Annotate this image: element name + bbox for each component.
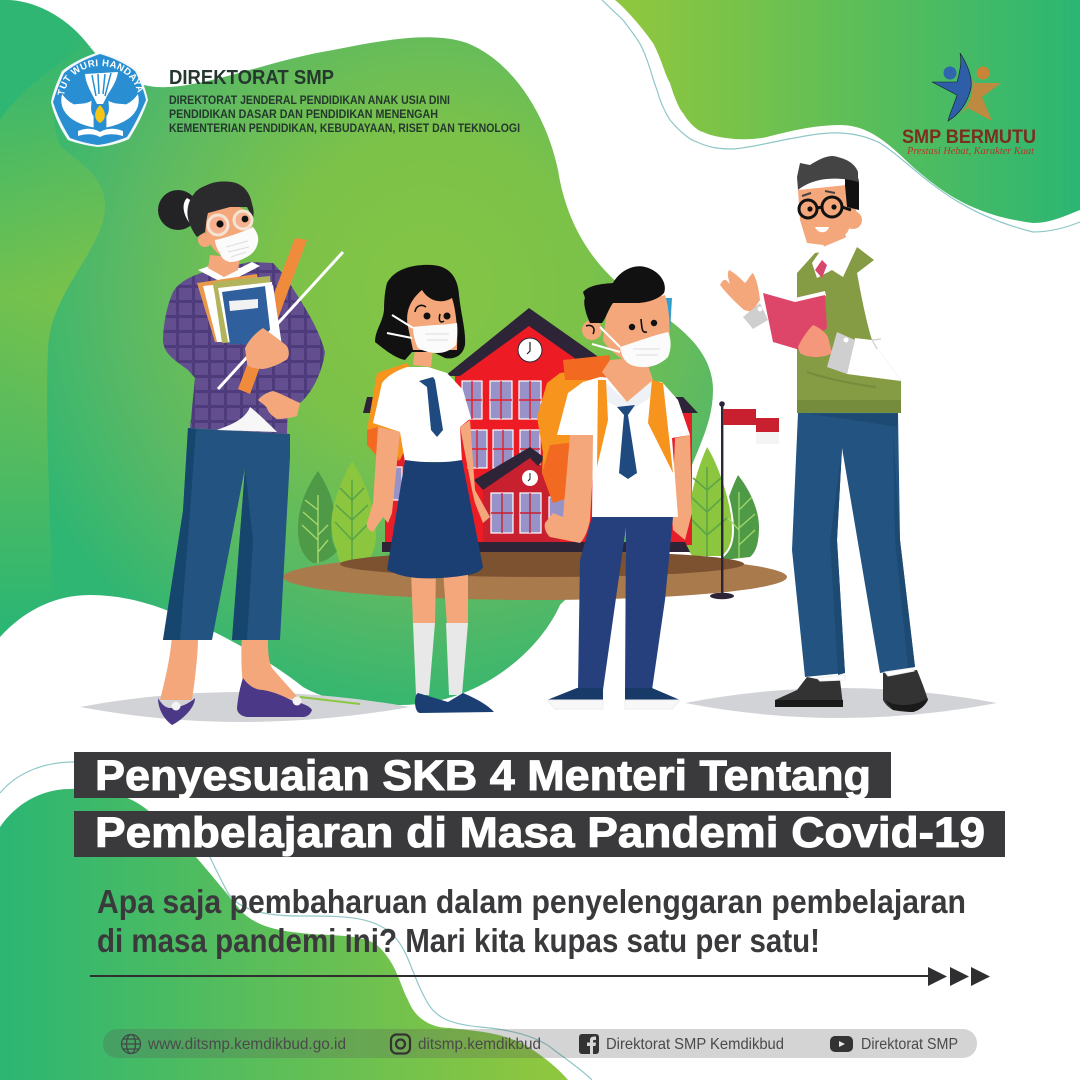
arms xyxy=(545,435,595,543)
figure: teacher man xyxy=(720,156,928,712)
ground xyxy=(283,554,787,600)
logo: SMP Bermutu xyxy=(902,53,1036,157)
right strap xyxy=(648,380,673,473)
website: www.ditsmp.kemdikbud.go.id xyxy=(147,1036,346,1053)
footer bar xyxy=(103,1029,977,1058)
trees on the left xyxy=(298,461,376,565)
collar area xyxy=(600,377,655,412)
backpack xyxy=(367,363,457,463)
head xyxy=(582,266,672,367)
header: organisation text xyxy=(169,67,520,135)
youtube name: Direktorat SMP xyxy=(861,1036,958,1053)
hand on book xyxy=(798,325,832,357)
logo: SMP Bermutu: SMP BERMUTU xyxy=(902,126,1036,148)
vest xyxy=(797,247,901,413)
background: main green blob xyxy=(0,0,713,705)
header: organisation text: KEMENTERIAN PENDIDIKAN, KEBUDAYAAN, RISET DAN TEKNOLOGI xyxy=(169,121,520,135)
collar and tie xyxy=(812,230,857,278)
logo: SMP Bermutu: Prestasi Hebat, Karakter Kuat xyxy=(906,146,1034,157)
icon: youtube xyxy=(830,1036,853,1052)
tie xyxy=(419,377,443,437)
instagram handle: ditsmp.kemdikbud xyxy=(418,1036,541,1053)
shoes xyxy=(415,693,494,713)
title bars xyxy=(74,752,1005,857)
illustration: ground shadows xyxy=(80,688,997,722)
red book xyxy=(763,291,827,350)
header: organisation text: DIREKTORAT SMP xyxy=(169,67,334,89)
title bars: Penyesuaian SKB 4 Menteri Tentang xyxy=(95,752,871,800)
purple plaid top xyxy=(163,262,325,434)
subtitle: di masa pandemi ini? Mari kita kupas satu per satu! xyxy=(97,922,820,959)
background: bottom-left green wave xyxy=(0,762,592,1080)
arrow xyxy=(90,967,990,986)
figure: teacher woman xyxy=(158,181,360,725)
hem xyxy=(817,668,914,681)
icon: globe xyxy=(122,1034,140,1054)
neck xyxy=(208,255,240,277)
subtitle: Apa saja pembaharuan dalam penyelenggaran pembelajaran xyxy=(97,883,966,920)
hand and pointer xyxy=(218,252,343,419)
figure: student boy xyxy=(537,266,692,709)
shirt xyxy=(373,367,471,462)
neck xyxy=(413,350,433,367)
subtitle xyxy=(97,883,966,959)
trees on the right xyxy=(685,445,759,560)
figure: student girl xyxy=(367,265,494,713)
shoes xyxy=(775,670,928,712)
facebook name: Direktorat SMP Kemdikbud xyxy=(606,1036,784,1053)
shirt xyxy=(557,377,690,517)
trousers xyxy=(163,428,290,640)
head xyxy=(797,156,862,245)
skirt xyxy=(387,460,483,578)
raised hand xyxy=(720,270,768,329)
arms xyxy=(367,427,400,532)
logo: Tut Wuri Handayani xyxy=(51,52,148,147)
trousers xyxy=(578,517,673,690)
backpack xyxy=(537,370,608,503)
head xyxy=(158,181,258,262)
icon: facebook xyxy=(579,1034,599,1054)
illustration: school scene xyxy=(283,308,787,600)
tie xyxy=(617,405,637,479)
header: organisation text: PENDIDIKAN DASAR DAN PENDIDIKAN MENENGAH xyxy=(169,107,438,121)
head xyxy=(375,265,465,360)
legs and shoes xyxy=(158,636,360,725)
cuff xyxy=(827,332,855,374)
collar xyxy=(198,262,260,284)
ruler xyxy=(238,238,307,394)
background: top-right green wave xyxy=(602,0,1080,232)
legs xyxy=(411,570,468,625)
school building xyxy=(363,308,698,552)
header: organisation text: DIREKTORAT JENDERAL PENDIDIKAN ANAK USIA DINI xyxy=(169,93,450,107)
shoes xyxy=(547,688,680,709)
icon: instagram xyxy=(391,1034,410,1054)
flag xyxy=(710,401,779,599)
title bars: Pembelajaran di Masa Pandemi Covid-19 xyxy=(95,809,985,857)
socks xyxy=(413,623,468,695)
trousers xyxy=(792,413,915,677)
books xyxy=(197,274,282,346)
